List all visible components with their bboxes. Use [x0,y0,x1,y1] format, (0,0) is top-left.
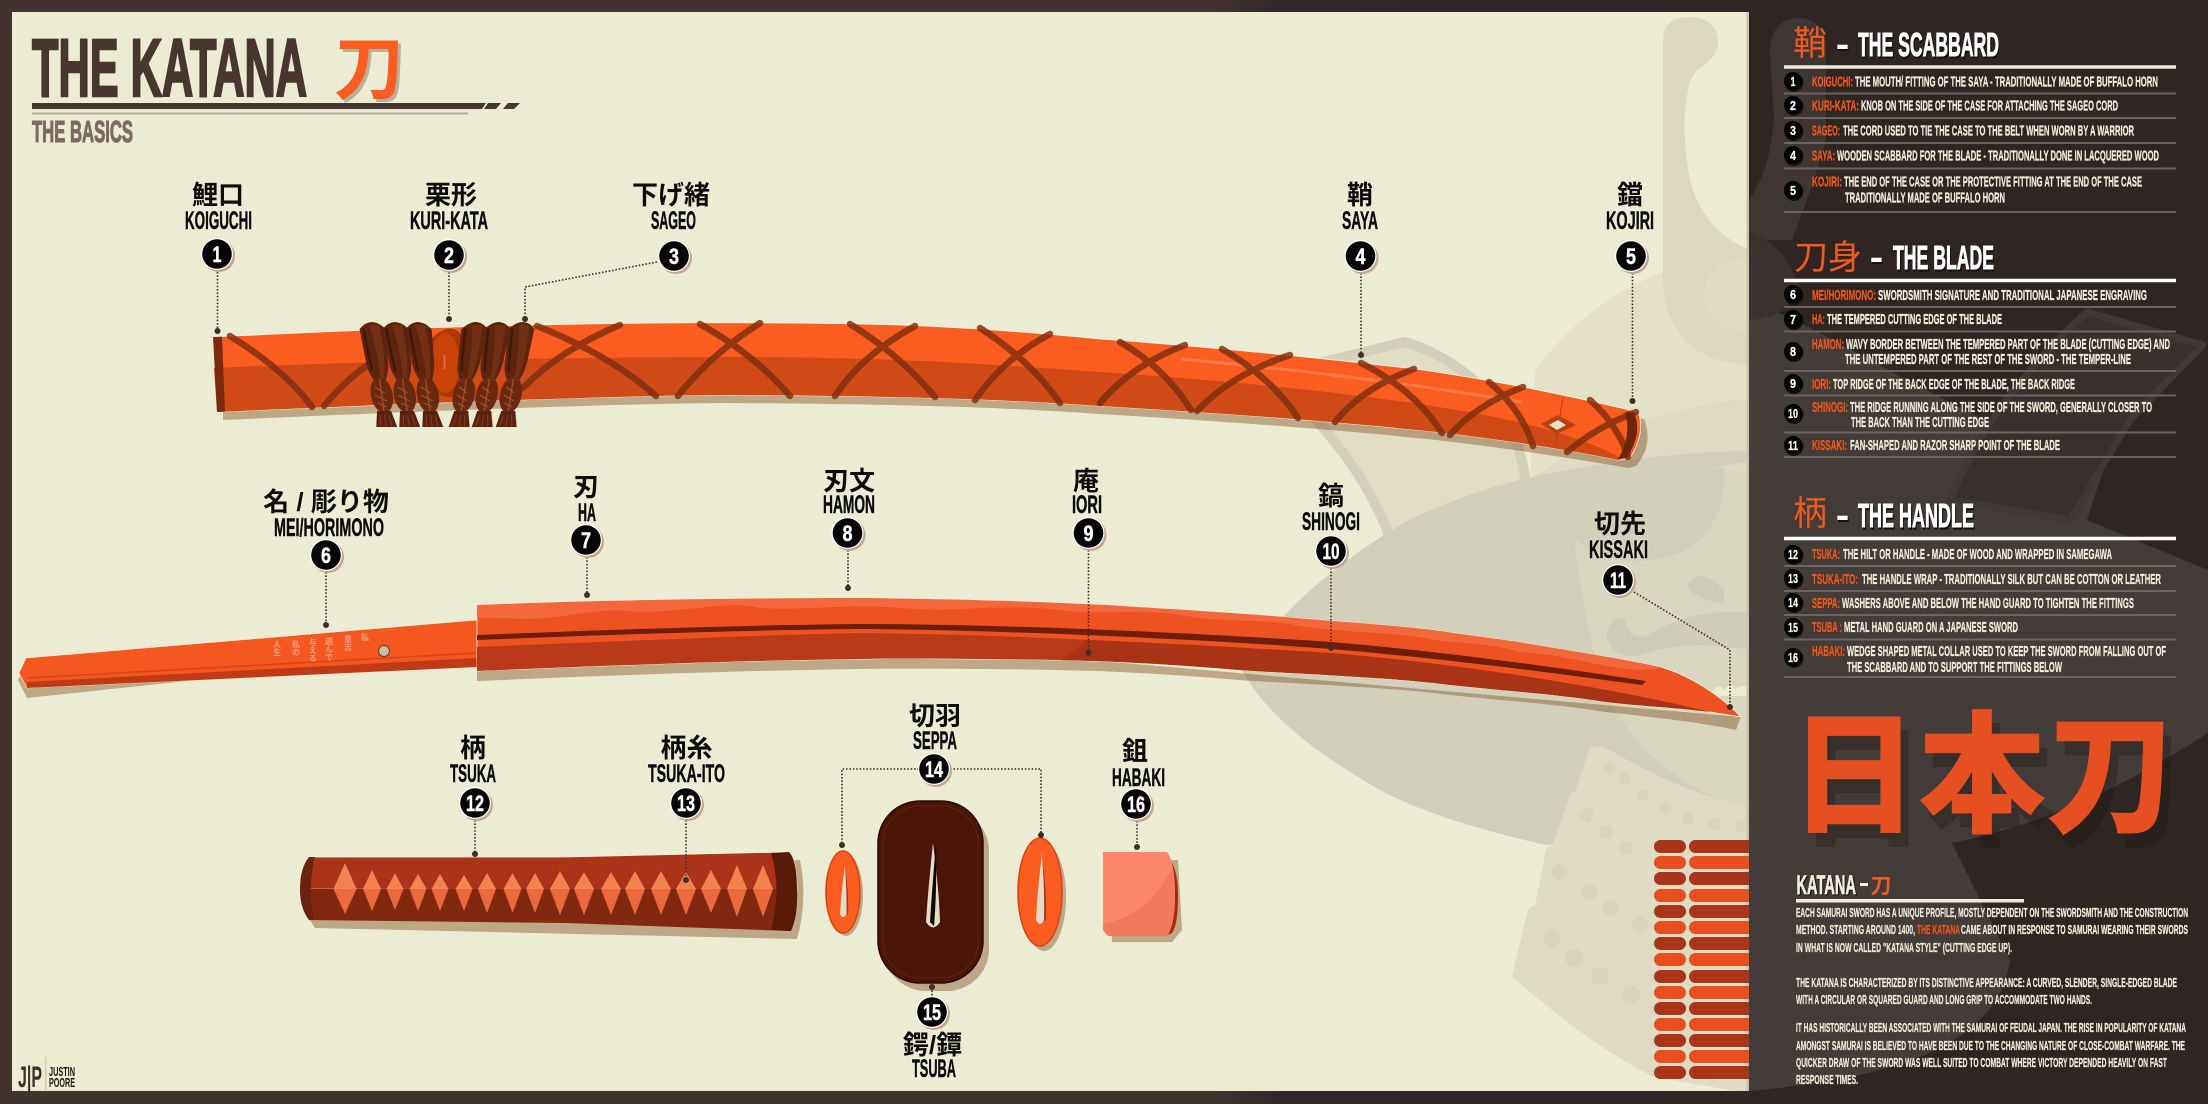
label 13 tsuka-ito: TSUKA-ITO [648,760,725,788]
helmet visor rim [1668,468,1724,475]
description paragraph 1: THE KATANA [1917,923,1960,937]
description paragraph 1: METHOD. STARTING AROUND 1400, [1796,923,1915,937]
neck guard rivets [1543,762,1747,1004]
title rule [32,103,520,109]
tang peg hole [378,646,390,656]
label 7 ha: 7 [581,528,591,553]
scabbard lower shade [214,357,1622,460]
label 4 saya: 鞘 [1347,180,1373,210]
row 15: TSUBA : [1812,619,1842,636]
row 2 [1784,96,2118,116]
row 4 [1784,146,2159,166]
label 6 mei horimono [263,487,389,573]
label 15 tsuba: TSUBA [912,1055,956,1083]
row 12: 12 [1788,547,1798,562]
panel crest outline [1950,312,2203,520]
label 13 tsuka-ito: 13 [677,791,695,816]
panel helmet overlay [1749,300,2208,1091]
label 1 koiguchi [185,180,252,272]
row 2: 2 [1790,98,1796,113]
label 8 hamon: 刃文 [823,466,875,496]
label 1 koiguchi: KOIGUCHI [185,207,252,235]
tang engraving: 私の [292,639,300,656]
row 3: 3 [1790,123,1796,138]
scabbard cords [230,323,1636,457]
row 4: SAYA: [1812,148,1835,165]
label 10 shinogi: 10 [1322,539,1340,564]
row 9: IORI: [1812,376,1831,393]
tang [19,620,477,688]
row 3 [1784,121,2134,141]
label 10 shinogi: SHINOGI [1302,508,1360,536]
handle heading [1793,495,1974,534]
label 15 tsuba: 鍔/鐔 [903,1030,962,1060]
tsuka shadow [310,860,803,939]
label 8 hamon: 8 [842,521,852,546]
label 5 kojiri: KOJIRI [1606,207,1654,235]
panel edge shadow [1746,12,1749,1091]
scabbard body [213,323,1641,460]
label 4 saya: SAYA [1342,207,1378,235]
row 11: 11 [1788,438,1798,453]
blade heading: – [1871,239,1882,276]
cream main panel [12,12,1776,1095]
label 3 sageo: SAGEO [651,207,696,235]
blade body [477,598,1741,717]
helmet teeth [1712,686,1750,696]
helmet silhouette background [1241,17,1776,1095]
row 1 [1784,72,2158,92]
label 14 seppa: 切羽 [909,701,961,731]
helmet eye [1687,576,1724,604]
crest rivets [1296,368,1378,393]
title [32,23,520,149]
label 7 ha [570,472,604,558]
row 5: KOJIRI: [1812,174,1842,191]
koiguchi band [213,337,225,412]
description paragraph 3 [1796,1021,2186,1087]
row 14 [1784,593,2134,613]
section: the blade: THE TEMPERED CUTTING EDGE OF THE BLADE [1827,311,2002,328]
description paragraph 1 [1796,906,2188,955]
row 3: SAGEO: [1812,123,1840,140]
row 13 [1784,569,2161,589]
label 2 kuri-kata [410,180,488,273]
row 16 [1784,643,2166,676]
blade shadow [18,628,1741,730]
row 8: 8 [1790,344,1796,359]
label 6 mei horimono: 名 / 彫り物 [263,487,389,517]
row 5: TRADITIONALLY MADE OF BUFFALO HORN [1845,190,2005,207]
helmet crest [1310,337,1530,535]
helmet mustache [1606,612,1750,656]
row 6: 6 [1790,287,1796,302]
row 1: 1 [1790,74,1796,89]
description heading: KATANA [1796,870,1856,900]
row 6: MEI/HORIMONO: [1812,287,1876,304]
row 15: 15 [1788,620,1798,635]
sageo cord wraps [359,322,535,427]
big kanji nihonto: 日本刀 [1790,670,2174,861]
label 1 koiguchi: 1 [212,242,222,267]
label 4 saya: 4 [1356,244,1366,269]
author logo: POORE [49,1075,75,1090]
tang engraving [272,632,370,662]
hamon band [477,598,1664,670]
helmet brim [1530,398,1760,480]
label 2 kuri-kata: 栗形 [425,180,477,210]
label 15 tsuba [903,996,962,1083]
row 9: 9 [1790,376,1796,391]
label 9 iori: 庵 [1073,466,1099,496]
row 5: 5 [1790,183,1796,198]
row 6 [1784,285,2147,305]
row 4: 4 [1790,148,1797,163]
blade lower dark overlay [1061,640,1710,712]
row 1: KOIGUCHI: [1812,74,1853,91]
helmet lower face [1575,480,1746,807]
label 16 habaki: 鉏 [1122,736,1148,766]
seppa washer left [826,851,863,936]
section: the blade [1784,239,2176,457]
helmet horn ring [1704,259,1776,331]
description paragraph 2 [1796,976,2177,1007]
label 5 kojiri [1606,180,1654,274]
label 12 tsuka: 12 [466,791,484,816]
blade illustration [18,598,1741,730]
author logo [18,1057,75,1094]
subtitle: THE BASICS [32,114,133,149]
handle tsuka [300,852,803,939]
tsuka body upper [300,852,797,890]
row 13: TSUKA-ITO: [1812,571,1858,588]
row 2: KURI-KATA: [1812,98,1859,115]
label 11 kissaki [1589,509,1648,598]
tsuka left cap [300,857,315,920]
kojiri seam [1555,397,1563,448]
label 1 koiguchi: 鯉口 [192,180,244,210]
handle heading: 柄 [1793,495,1827,533]
description paragraph 1: IN WHAT IS NOW CALLED "KATANA STYLE" (CUTTING EDGE UP). [1796,941,2012,955]
row 12: TSUKA: [1812,546,1840,563]
neck guard orange lacing bars [1654,840,1759,1079]
row 7: HA: [1812,311,1825,328]
label 6 mei horimono: MEI/HORIMONO [274,514,384,542]
label 3 sageo: 3 [669,244,679,269]
section: the scabbard [1784,25,2176,212]
label 12 tsuka: TSUKA [450,760,496,788]
label 13 tsuka-ito [648,733,725,821]
neck guard plates [1512,746,1760,1095]
blade lower bevel [477,633,1710,712]
label 14 seppa: 14 [925,757,944,782]
scabbard heading [1793,25,1999,63]
seppa washer right [1018,838,1066,951]
label 4 saya [1342,180,1378,274]
label 11 kissaki: 切先 [1594,509,1646,539]
tsuka right cap [771,852,797,931]
leader lines [214,262,1733,997]
title text: THE KATANA [32,23,307,114]
label 10 shinogi: 鎬 [1318,481,1344,511]
label 12 tsuka [450,733,496,821]
tang engraving: 選んで [324,636,334,661]
panel mid shade [1749,240,1799,320]
row 10: THE BACK THAN THE CUTTING EDGE [1851,414,1989,431]
label 2 kuri-kata: KURI-KATA [410,207,488,235]
label 3 sageo [632,180,710,274]
row 7 [1784,310,2002,330]
label 9 iori [1072,466,1106,551]
row 14: SEPPA: [1812,595,1840,612]
right dark panel [1749,0,2208,1104]
row 16: 16 [1788,650,1798,665]
label 16 habaki [1112,736,1165,822]
label 9 iori: 9 [1084,521,1094,546]
handle heading: – [1837,497,1848,534]
scabbard heading: – [1837,26,1848,63]
label 16 habaki: 16 [1127,792,1145,817]
row 16: HABAKI: [1812,643,1845,660]
label 16 habaki: HABAKI [1112,764,1165,792]
panel horn silhouette [1749,18,1826,240]
row 11 [1784,436,2060,456]
scabbard highlight [1181,359,1521,402]
katana description [1796,870,2188,1087]
description heading: 刀 [1870,875,1892,898]
row 15: METAL HAND GUARD ON A JAPANESE SWORD [1844,619,2018,636]
tsuka wrap diamonds [334,863,773,917]
label 11 kissaki: 11 [1610,568,1626,593]
tsuba guard [878,801,989,991]
blade heading [1794,239,1994,277]
label 8 hamon [823,466,875,551]
row 12 [1784,545,2112,565]
label 14 seppa [909,701,961,787]
row 8: HAMON: [1812,336,1844,353]
label 7 ha: 刃 [573,472,599,502]
label 13 tsuka-ito: 柄糸 [660,733,713,763]
section: the handle [1784,495,2176,677]
label 2 kuri-kata: 2 [444,243,454,268]
label 6 mei horimono: 6 [321,543,331,568]
label 3 sageo: 下げ緒 [632,180,710,210]
handle heading: THE HANDLE [1858,497,1974,534]
label 12 tsuka: 柄 [460,733,486,763]
row 15 [1784,618,2018,638]
tang engraving: 人生 [272,640,282,656]
scabbard illustration [213,322,1648,468]
label 14 seppa: SEPPA [913,727,957,755]
scabbard shadow [223,332,1648,468]
habaki collar [1103,852,1182,942]
description paragraph 3: RESPONSE TIMES. [1796,1073,1858,1087]
row 8 [1784,336,2170,368]
label 11 kissaki: KISSAKI [1589,536,1648,564]
label 9 iori: IORI [1072,491,1102,519]
tang engraving: 与える [308,637,318,662]
row 10: 10 [1788,406,1798,421]
blade heading: THE BLADE [1893,239,1994,276]
label 5 kojiri: 鐺 [1617,180,1643,210]
helmet visor [1241,450,1760,845]
row 7: 7 [1790,312,1796,327]
label 10 shinogi [1302,481,1360,569]
tang engraving: 私 [360,632,370,642]
kojiri end cap [1618,412,1637,459]
label 8 hamon: HAMON [823,491,875,519]
kojiri diamond [1541,415,1576,434]
tang lower stripe [27,658,477,688]
row 5 [1784,174,2142,207]
helmet horn [1663,17,1750,365]
row 9 [1784,374,2075,394]
blade heading: 刀身 [1794,239,1862,277]
tang engraving: 意志 [344,634,352,651]
row 11: KISSAKI: [1812,437,1847,454]
label 7 ha: HA [578,499,596,527]
helmet dome [1530,272,1746,477]
label 5 kojiri: 5 [1626,244,1636,269]
tsuka body lower [300,889,797,931]
row 10: SHINOGI: [1812,399,1848,416]
scabbard heading: 鞘 [1793,25,1827,63]
label 15 tsuba: 15 [923,1000,941,1025]
blade groove [477,624,1646,685]
row 14: 14 [1788,595,1799,610]
row 13: 13 [1788,571,1798,586]
scabbard heading: THE SCABBARD [1858,26,1999,63]
logo name: JUSTIN [49,1064,75,1079]
kurikata knob [430,329,462,397]
logo monogram: J|P [18,1061,42,1094]
title kanji: 刀 [334,30,404,108]
row 10 [1784,399,2152,431]
